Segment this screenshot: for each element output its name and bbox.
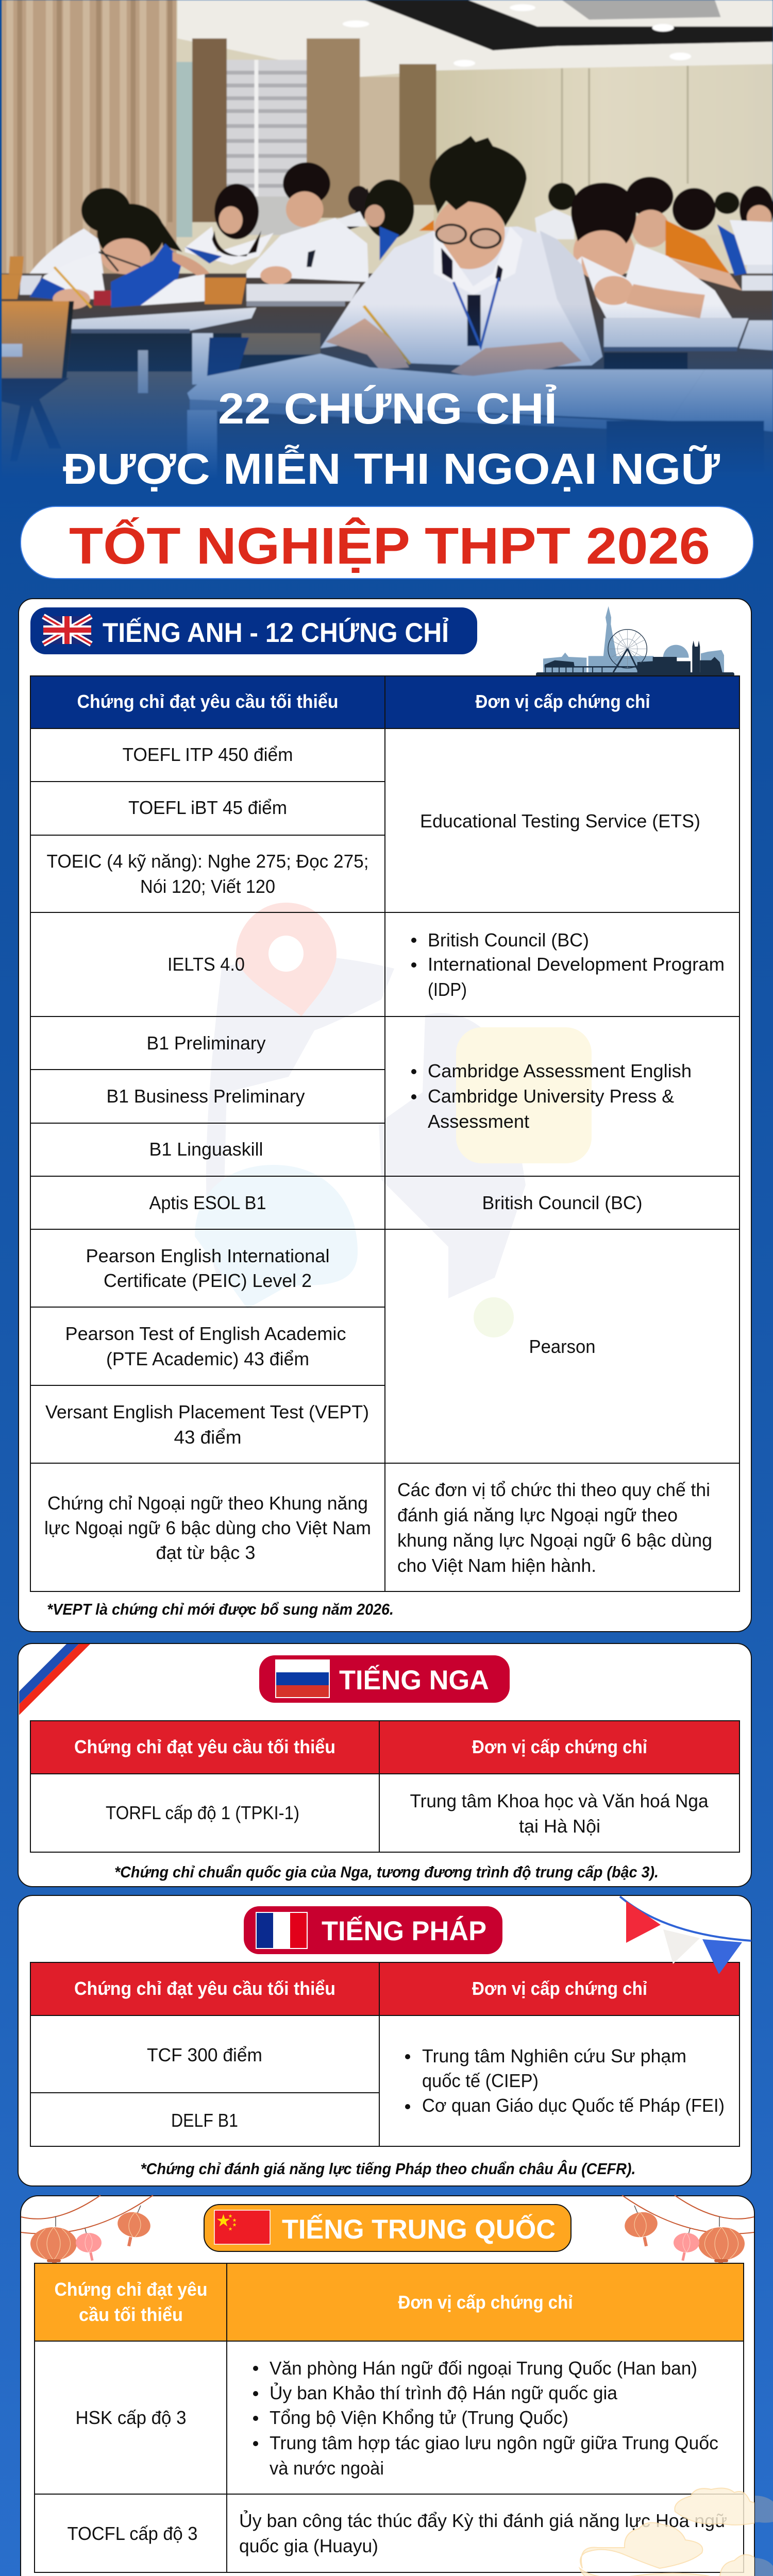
icon: UK flag <box>43 616 91 644</box>
table: English certificates: TOEIC (4 kỹ năng): Nghe 275; Đọc 275; <box>46 851 369 872</box>
title pill: tốt nghiệp THPT 2026: TỐT NGHIỆP THPT 2026 <box>69 517 710 575</box>
title pill: tốt nghiệp THPT 2026 <box>21 506 753 579</box>
icon: Chinese flag: ★ <box>228 2214 232 2218</box>
table: English certificates: Chứng chỉ đạt yêu cầu tối thiểu <box>77 691 338 712</box>
table: Russian certificates: Đơn vị cấp chứng chỉ <box>472 1736 647 1757</box>
table: Chinese certificates: Trung tâm hợp tác giao lưu ngôn ngữ giữa Trung Quốc <box>270 2432 718 2453</box>
hero photo: students taking exam <box>2 0 773 492</box>
icon: Chinese flag <box>214 2210 270 2244</box>
panel: Tiếng Pháp <box>18 1895 751 2186</box>
icon: UK city skyline <box>536 606 734 676</box>
table: French certificates: Chứng chỉ đạt yêu cầu tối thiểu <box>74 1978 335 1999</box>
table: Russian certificates <box>30 1721 740 1852</box>
table: English certificates: Assessment <box>428 1111 529 1132</box>
table: English certificates: Versant English Placement Test (VEPT) <box>45 1401 369 1422</box>
hero photo fade into blue background <box>0 304 773 500</box>
icon: French flag <box>256 1912 307 1948</box>
table: Chinese certificates: TOCFL cấp độ 3 <box>67 2523 198 2544</box>
table: Chinese certificates: và nước ngoài <box>270 2458 384 2479</box>
table: Russian certificates: Chứng chỉ đạt yêu cầu tối thiểu <box>74 1736 335 1757</box>
heading pill: Tiếng Nga <box>259 1655 510 1703</box>
heading pill: Tiếng Pháp: TIẾNG PHÁP <box>322 1916 486 1946</box>
table: English certificates: Các đơn vị tổ chức thi theo quy chế thi <box>397 1479 710 1500</box>
heading pill: Tiếng Trung Quốc: TIẾNG TRUNG QUỐC <box>282 2214 556 2245</box>
icon: decorative clouds <box>580 2488 763 2576</box>
icon: lanterns right <box>622 2195 754 2276</box>
table: English certificates: Đơn vị cấp chứng chỉ <box>475 691 650 712</box>
table: English certificates: (PTE Academic) 43 điểm <box>106 1348 309 1369</box>
table: English certificates <box>30 676 740 1591</box>
table: Chinese certificates: Đơn vị cấp chứng chỉ <box>398 2292 573 2313</box>
icon: Chinese flag: ★ <box>216 2213 230 2229</box>
table: Chinese certificates: Ủy ban Khảo thí trình độ Hán ngữ quốc gia <box>270 2382 618 2403</box>
icon: Russian flag <box>276 1660 329 1698</box>
table: English certificates: IELTS 4.0 <box>167 954 245 975</box>
table: French certificates: Đơn vị cấp chứng chỉ <box>472 1978 647 1999</box>
table: English certificates: Certificate (PEIC) Level 2 <box>104 1270 312 1291</box>
watermark: faint map illustration <box>195 903 592 1337</box>
table: English certificates: Nói 120; Viết 120 <box>140 876 275 897</box>
table: English certificates: Pearson <box>529 1336 596 1357</box>
heading pill: Tiếng Anh 12 chứng chỉ <box>30 607 477 654</box>
table: Russian certificates: tại Hà Nội <box>519 1816 600 1837</box>
table: English certificates: British Council (BC) <box>482 1192 642 1213</box>
table: English certificates: Pearson English International <box>86 1245 330 1266</box>
panel: Tiếng Nga <box>18 1643 751 1887</box>
table: English certificates: Educational Testing Service (ETS) <box>420 810 700 832</box>
table: Russian certificates: Trung tâm Khoa học và Văn hoá Nga <box>410 1790 709 1811</box>
table: English certificates: Cambridge University Press & <box>428 1086 674 1107</box>
table: English certificates: Pearson Test of English Academic <box>65 1323 346 1344</box>
table: French certificates: Trung tâm Nghiên cứu Sư phạm <box>422 2045 686 2066</box>
table: English certificates: TOEFL ITP 450 điểm <box>123 744 293 765</box>
icon: Chinese flag: ★ <box>232 2223 237 2227</box>
panel: Tiếng Trung Quốc <box>21 2195 773 2576</box>
table: English certificates: đạt từ bậc 3 <box>156 1542 256 1563</box>
table: English certificates: Chứng chỉ Ngoại ngữ theo Khung năng <box>47 1493 368 1514</box>
table: French certificates: quốc tế (CIEP) <box>422 2070 539 2091</box>
table: French certificates <box>30 1962 740 2146</box>
table: English certificates: B1 Preliminary <box>146 1032 266 1054</box>
table: Chinese certificates: Văn phòng Hán ngữ đối ngoại Trung Quốc (Han ban) <box>270 2358 697 2379</box>
table: Chinese certificates: Ủy ban công tác thúc đẩy Kỳ thi đánh giá năng lực Hoa ngữ <box>239 2510 727 2531</box>
table: English certificates: B1 Linguaskill <box>149 1139 263 1160</box>
title: 22 chứng chỉ được miễn thi ngoại ngữ: 22 CHỨNG CHỈ <box>218 384 557 433</box>
title: 22 chứng chỉ được miễn thi ngoại ngữ <box>63 384 720 493</box>
icon: Chinese flag: ★ <box>228 2227 232 2231</box>
table: Chinese certificates <box>35 2263 744 2572</box>
table: English certificates: Aptis ESOL B1 <box>149 1192 266 1213</box>
table: Chinese certificates: quốc gia (Huayu) <box>239 2535 378 2556</box>
table: English certificates: Cambridge Assessment English <box>428 1060 692 1081</box>
table: French certificates: Cơ quan Giáo dục Quốc tế Pháp (FEI) <box>422 2095 725 2116</box>
table: English certificates: đánh giá năng lực Ngoại ngữ theo <box>397 1504 678 1526</box>
footnote: TORFL: *Chứng chỉ chuẩn quốc gia của Nga, tương đương trình độ trung cấp (bậc 3). <box>114 1863 659 1881</box>
table: Chinese certificates: Tổng bộ Viện Khổng tử (Trung Quốc) <box>270 2407 568 2428</box>
icon: Chinese flag: ★ <box>232 2218 237 2223</box>
icon: Russian ribbon corner <box>19 1644 90 1715</box>
table: Russian certificates: TORFL cấp độ 1 (TPKI-1) <box>106 1802 299 1823</box>
table: English certificates: B1 Business Preliminary <box>106 1086 305 1107</box>
icon: lanterns left <box>21 2195 153 2276</box>
title: 22 chứng chỉ được miễn thi ngoại ngữ: ĐƯỢC MIỄN THI NGOẠI NGỮ <box>63 445 720 493</box>
table: English certificates: TOEFL iBT 45 điểm <box>128 797 287 818</box>
table: English certificates: cho Việt Nam hiện hành. <box>397 1555 596 1576</box>
panel: Tiếng Anh <box>19 599 751 1632</box>
table: English certificates: British Council (BC) <box>428 929 589 951</box>
table: French certificates: DELF B1 <box>171 2110 238 2131</box>
table: English certificates: International Development Program <box>428 954 725 975</box>
heading pill: Tiếng Nga: TIẾNG NGA <box>339 1665 489 1696</box>
footnote: VEPT: *VEPT là chứng chỉ mới được bổ sung năm 2026. <box>47 1600 394 1618</box>
table: English certificates: (IDP) <box>428 979 467 1000</box>
table: English certificates: khung năng lực Ngoại ngữ 6 bậc dùng <box>397 1530 712 1551</box>
heading pill: Tiếng Pháp <box>244 1906 502 1954</box>
icon: French bunting <box>620 1896 751 1974</box>
table: Chinese certificates: HSK cấp độ 3 <box>75 2407 187 2428</box>
table: English certificates: lực Ngoại ngữ 6 bậc dùng cho Việt Nam <box>44 1517 371 1538</box>
heading pill: Tiếng Anh 12 chứng chỉ: TIẾNG ANH - 12 CHỨNG CHỈ <box>103 617 449 648</box>
table: English certificates: 43 điểm <box>174 1427 241 1448</box>
table: Chinese certificates: cầu tối thiểu <box>79 2304 183 2325</box>
table: French certificates: TCF 300 điểm <box>147 2044 262 2065</box>
clouds outside panel edge <box>631 2496 773 2576</box>
table: Chinese certificates: Chứng chỉ đạt yêu <box>55 2279 207 2300</box>
footnote: CEFR: *Chứng chỉ đánh giá năng lực tiếng Pháp theo chuẩn châu Âu (CEFR). <box>140 2159 636 2178</box>
heading pill: Tiếng Trung Quốc <box>204 2205 571 2251</box>
